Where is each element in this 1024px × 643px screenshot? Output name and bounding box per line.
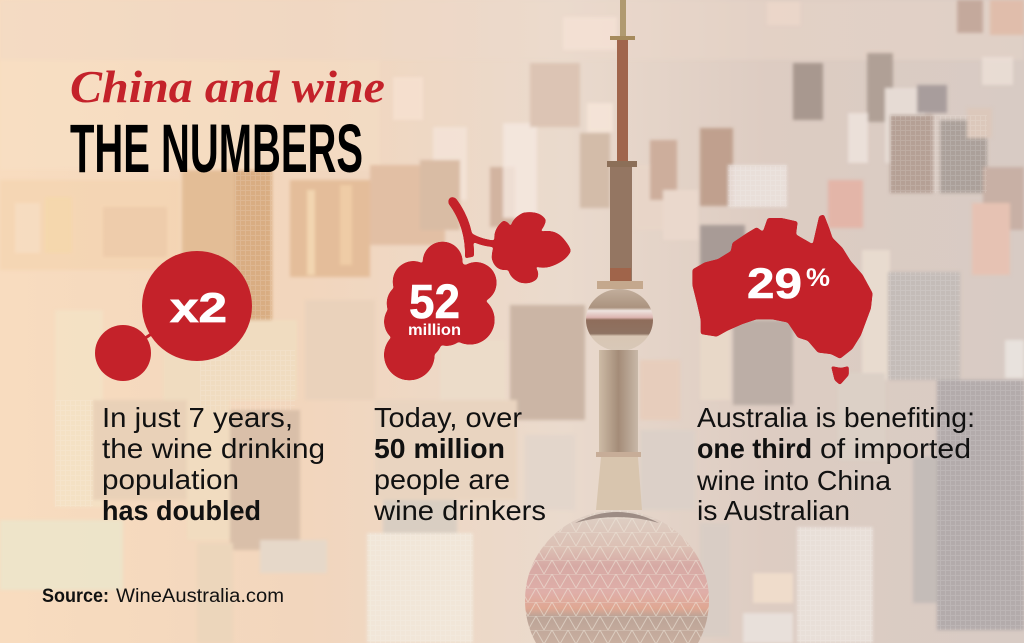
- stat 1: x2 with linked circles: [95, 251, 252, 381]
- stat 3 text: Australia is benefiting:: [697, 402, 975, 433]
- stat 1 text: the wine drinking: [102, 433, 325, 464]
- Oriental Pearl Tower: [525, 0, 709, 643]
- stat 3 text: of imported: [820, 433, 971, 464]
- stat 1 text: has doubled: [102, 495, 261, 526]
- stat 2: grape bunch with 52 million: [384, 197, 571, 380]
- stat 3 text: one third: [697, 433, 812, 464]
- stat 2 text: people are: [374, 464, 510, 495]
- stat 2 text: 50 million: [374, 433, 505, 464]
- grape leaf: [492, 212, 571, 283]
- stat 3 text: is Australian: [697, 495, 850, 526]
- stat 2 text: Today, over: [374, 402, 522, 433]
- stat 1 text: population: [102, 464, 239, 495]
- stat 1 text: In just 7 years,: [102, 402, 293, 433]
- stat 3: Australia map with 29%: 29: [747, 260, 802, 308]
- Tasmania: [832, 367, 848, 384]
- source: Source:: [42, 586, 109, 607]
- stat 3: Australia map with 29%: [693, 216, 872, 384]
- source: WineAustralia.com: [116, 586, 284, 607]
- stat 3 text: wine into China: [696, 465, 891, 496]
- stat 1: x2 with linked circles: x2: [170, 284, 227, 331]
- window texture: [55, 115, 1024, 643]
- stat 3: Australia map with 29%: %: [806, 264, 830, 292]
- stat 2 text: wine drinkers: [373, 495, 546, 526]
- title: China and wine: [70, 61, 385, 112]
- title: THE NUMBERS: [70, 110, 363, 187]
- title: [70, 61, 385, 187]
- stat 2: grape bunch with 52 million: 52: [409, 276, 460, 329]
- stat 2: grape bunch with 52 million: million: [408, 322, 461, 339]
